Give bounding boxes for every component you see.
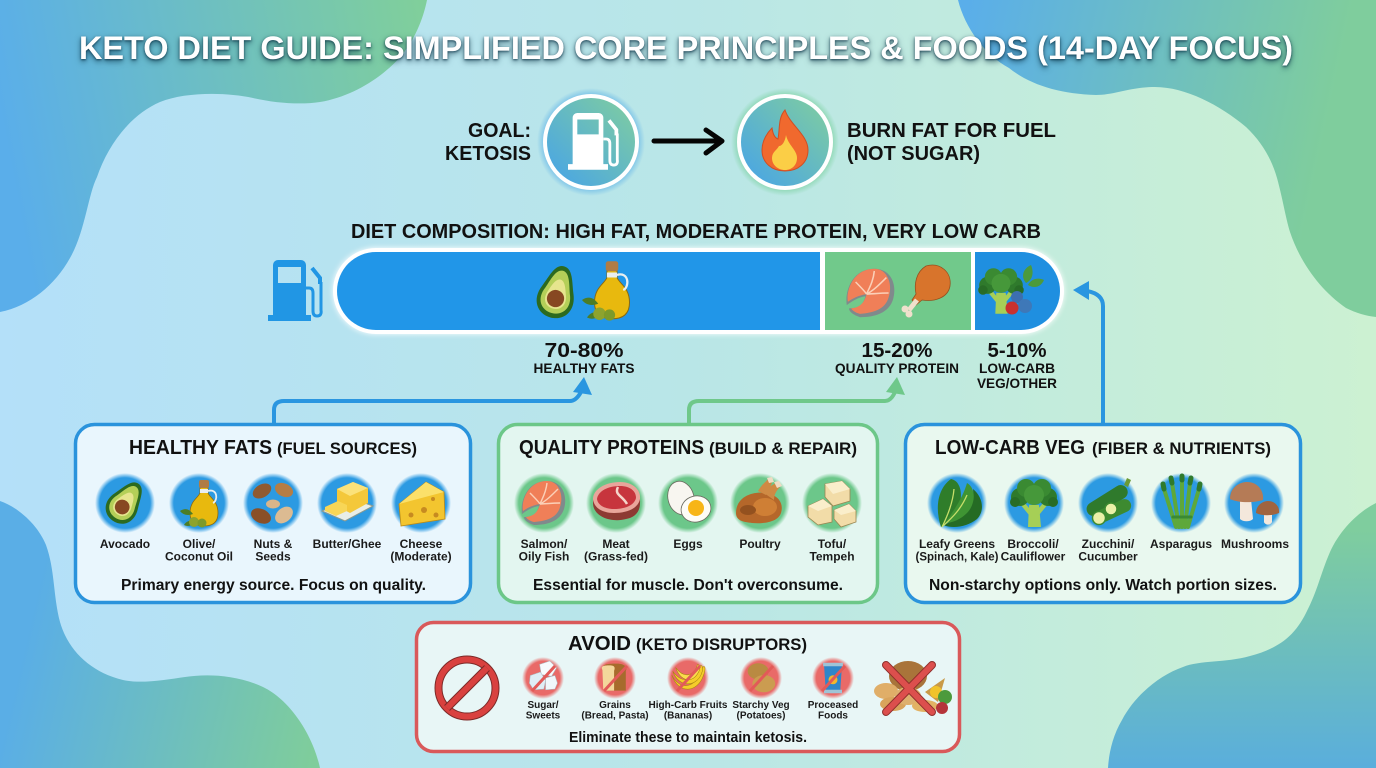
food: olive and coconut oil: Olive/ [183,537,215,551]
food: eggs: Eggs [673,537,703,551]
avoid: starchy veg: Starchy Veg [732,700,790,711]
avoid: processed foods [808,657,858,722]
panel heading [519,437,857,459]
panel: healthy fats [76,424,470,602]
avoid: sugar: Sugar/ [527,700,559,711]
food: poultry [730,473,790,551]
food: cheese [390,473,452,564]
food: avocado [95,473,155,551]
food: nuts and seeds [243,473,303,564]
food: meat: Meat [602,537,630,551]
avoid: starchy veg: (Potatoes) [737,710,785,722]
food: cheese: (Moderate) [390,550,452,564]
food: tofu: Tofu/ [818,537,846,551]
title: KETO DIET GUIDE: SIMPLIFIED CORE PRINCIPLES & FOODS (14-DAY FOCUS) [79,30,1293,66]
avoid: processed foods: Proceased [808,700,858,711]
food: tofu: Tempeh [809,550,855,564]
food: broccoli: Broccoli/ [1007,537,1059,551]
segment: quality protein [825,252,971,330]
arrow: goal to fat burning [654,130,722,153]
segment: healthy fats [337,251,820,333]
avoid: high-carb fruits: (Bananas) [664,710,712,722]
icon: crossed-out food pile [874,661,952,714]
food: asparagus: Asparagus [1150,537,1212,551]
food: broccoli [1001,473,1066,564]
composition bar [333,248,1064,334]
goal section [445,88,1056,196]
food: eggs [658,473,718,551]
burn fat text: (NOT SUGAR) [847,143,980,165]
arrow: protein panel to bar [689,377,905,424]
food: olive and coconut oil: Coconut Oil [165,550,233,564]
food: broccoli: Cauliflower [1001,550,1066,564]
food: butter and ghee [313,473,382,551]
food: zucchini: Cucumber [1078,550,1138,564]
segment: low-carb veg [975,252,1060,330]
panel heading: (BUILD & REPAIR) [709,439,857,458]
goal text: KETOSIS [445,143,531,165]
label: protein share: QUALITY PROTEIN [835,360,959,376]
goal text [445,120,531,165]
food: leafy greens [916,473,998,564]
heading: diet composition: DIET COMPOSITION: HIGH FAT, MODERATE PROTEIN, VERY LOW CARB [351,221,1041,243]
food: leafy greens: Leafy Greens [919,537,995,551]
panel note: Non-starchy options only. Watch portion sizes. [929,577,1277,594]
panel heading [568,633,807,655]
food: zucchini [1078,473,1138,564]
panel heading: (FIBER & NUTRIENTS) [1092,439,1271,458]
burn fat text: BURN FAT FOR FUEL [847,120,1056,142]
arrow: fats panel to bar [274,377,592,424]
food: meat: (Grass-fed) [584,550,648,564]
food: nuts and seeds: Seeds [255,550,291,564]
label: fats share: HEALTHY FATS [534,360,634,376]
goal text: GOAL: [468,120,531,142]
food: asparagus [1150,473,1212,551]
label: veg share: LOW-CARB [979,360,1055,376]
food: avocado: Avocado [100,537,150,551]
panel heading: LOW-CARB VEG [935,437,1085,459]
panel: avoid [416,622,960,752]
food: tofu [802,473,862,564]
label: fats share: 70-80% [544,340,624,362]
panel heading: (FUEL SOURCES) [277,439,417,458]
food: meat [584,473,648,564]
label: fats share [534,340,634,376]
panel heading [935,437,1271,459]
arrow: veg panel to bar [1073,281,1103,424]
label: veg share: 5-10% [988,340,1047,362]
panel heading: AVOID [568,633,631,655]
icon: flame circle [731,88,839,196]
food: olive and coconut oil [165,473,233,564]
panel: quality proteins [498,424,878,602]
food: salmon: Salmon/ [521,537,567,551]
label: veg share: VEG/OTHER [977,375,1057,391]
avoid: high-carb fruits [649,657,728,722]
panel: low-carb veg [906,424,1300,602]
food: salmon: Oily Fish [519,550,569,564]
panel heading: QUALITY PROTEINS [519,437,704,459]
icon: blue fuel pump [268,260,321,321]
avoid: starchy veg [732,657,790,722]
food: zucchini: Zucchini/ [1082,537,1134,551]
food: leafy greens: (Spinach, Kale) [916,550,998,564]
panel heading: HEALTHY FATS [129,437,272,459]
panel note: Primary energy source. Focus on quality. [121,577,426,594]
avoid: processed foods: Foods [818,710,848,722]
avoid: grains [581,657,649,722]
food: poultry: Poultry [739,537,781,551]
icon: drumstick [902,265,950,318]
food: mushrooms: Mushrooms [1221,537,1289,551]
avoid: grains: (Bread, Pasta) [581,710,649,722]
avoid: grains: Grains [599,700,631,711]
food: nuts and seeds: Nuts & [254,537,292,551]
avoid: sugar: Sweets [526,710,561,722]
icon: fuel pump circle [537,88,645,196]
avoid: high-carb fruits: High-Carb Fruits [649,700,727,711]
label: protein share: 15-20% [862,340,933,362]
icon: prohibition sign [438,660,496,716]
food: butter and ghee: Butter/Ghee [313,537,382,551]
panel note: Eliminate these to maintain ketosis. [569,730,807,746]
food: cheese: Cheese [400,537,442,551]
food: mushrooms [1221,473,1289,551]
avoid: sugar [522,657,564,722]
burn fat text [847,120,1056,165]
panel heading [129,437,417,459]
panel heading: (KETO DISRUPTORS) [636,635,807,654]
food: salmon [514,473,574,564]
label: protein share [835,340,959,376]
panel note: Essential for muscle. Don't overconsume. [533,577,843,594]
label: veg share [977,340,1057,391]
